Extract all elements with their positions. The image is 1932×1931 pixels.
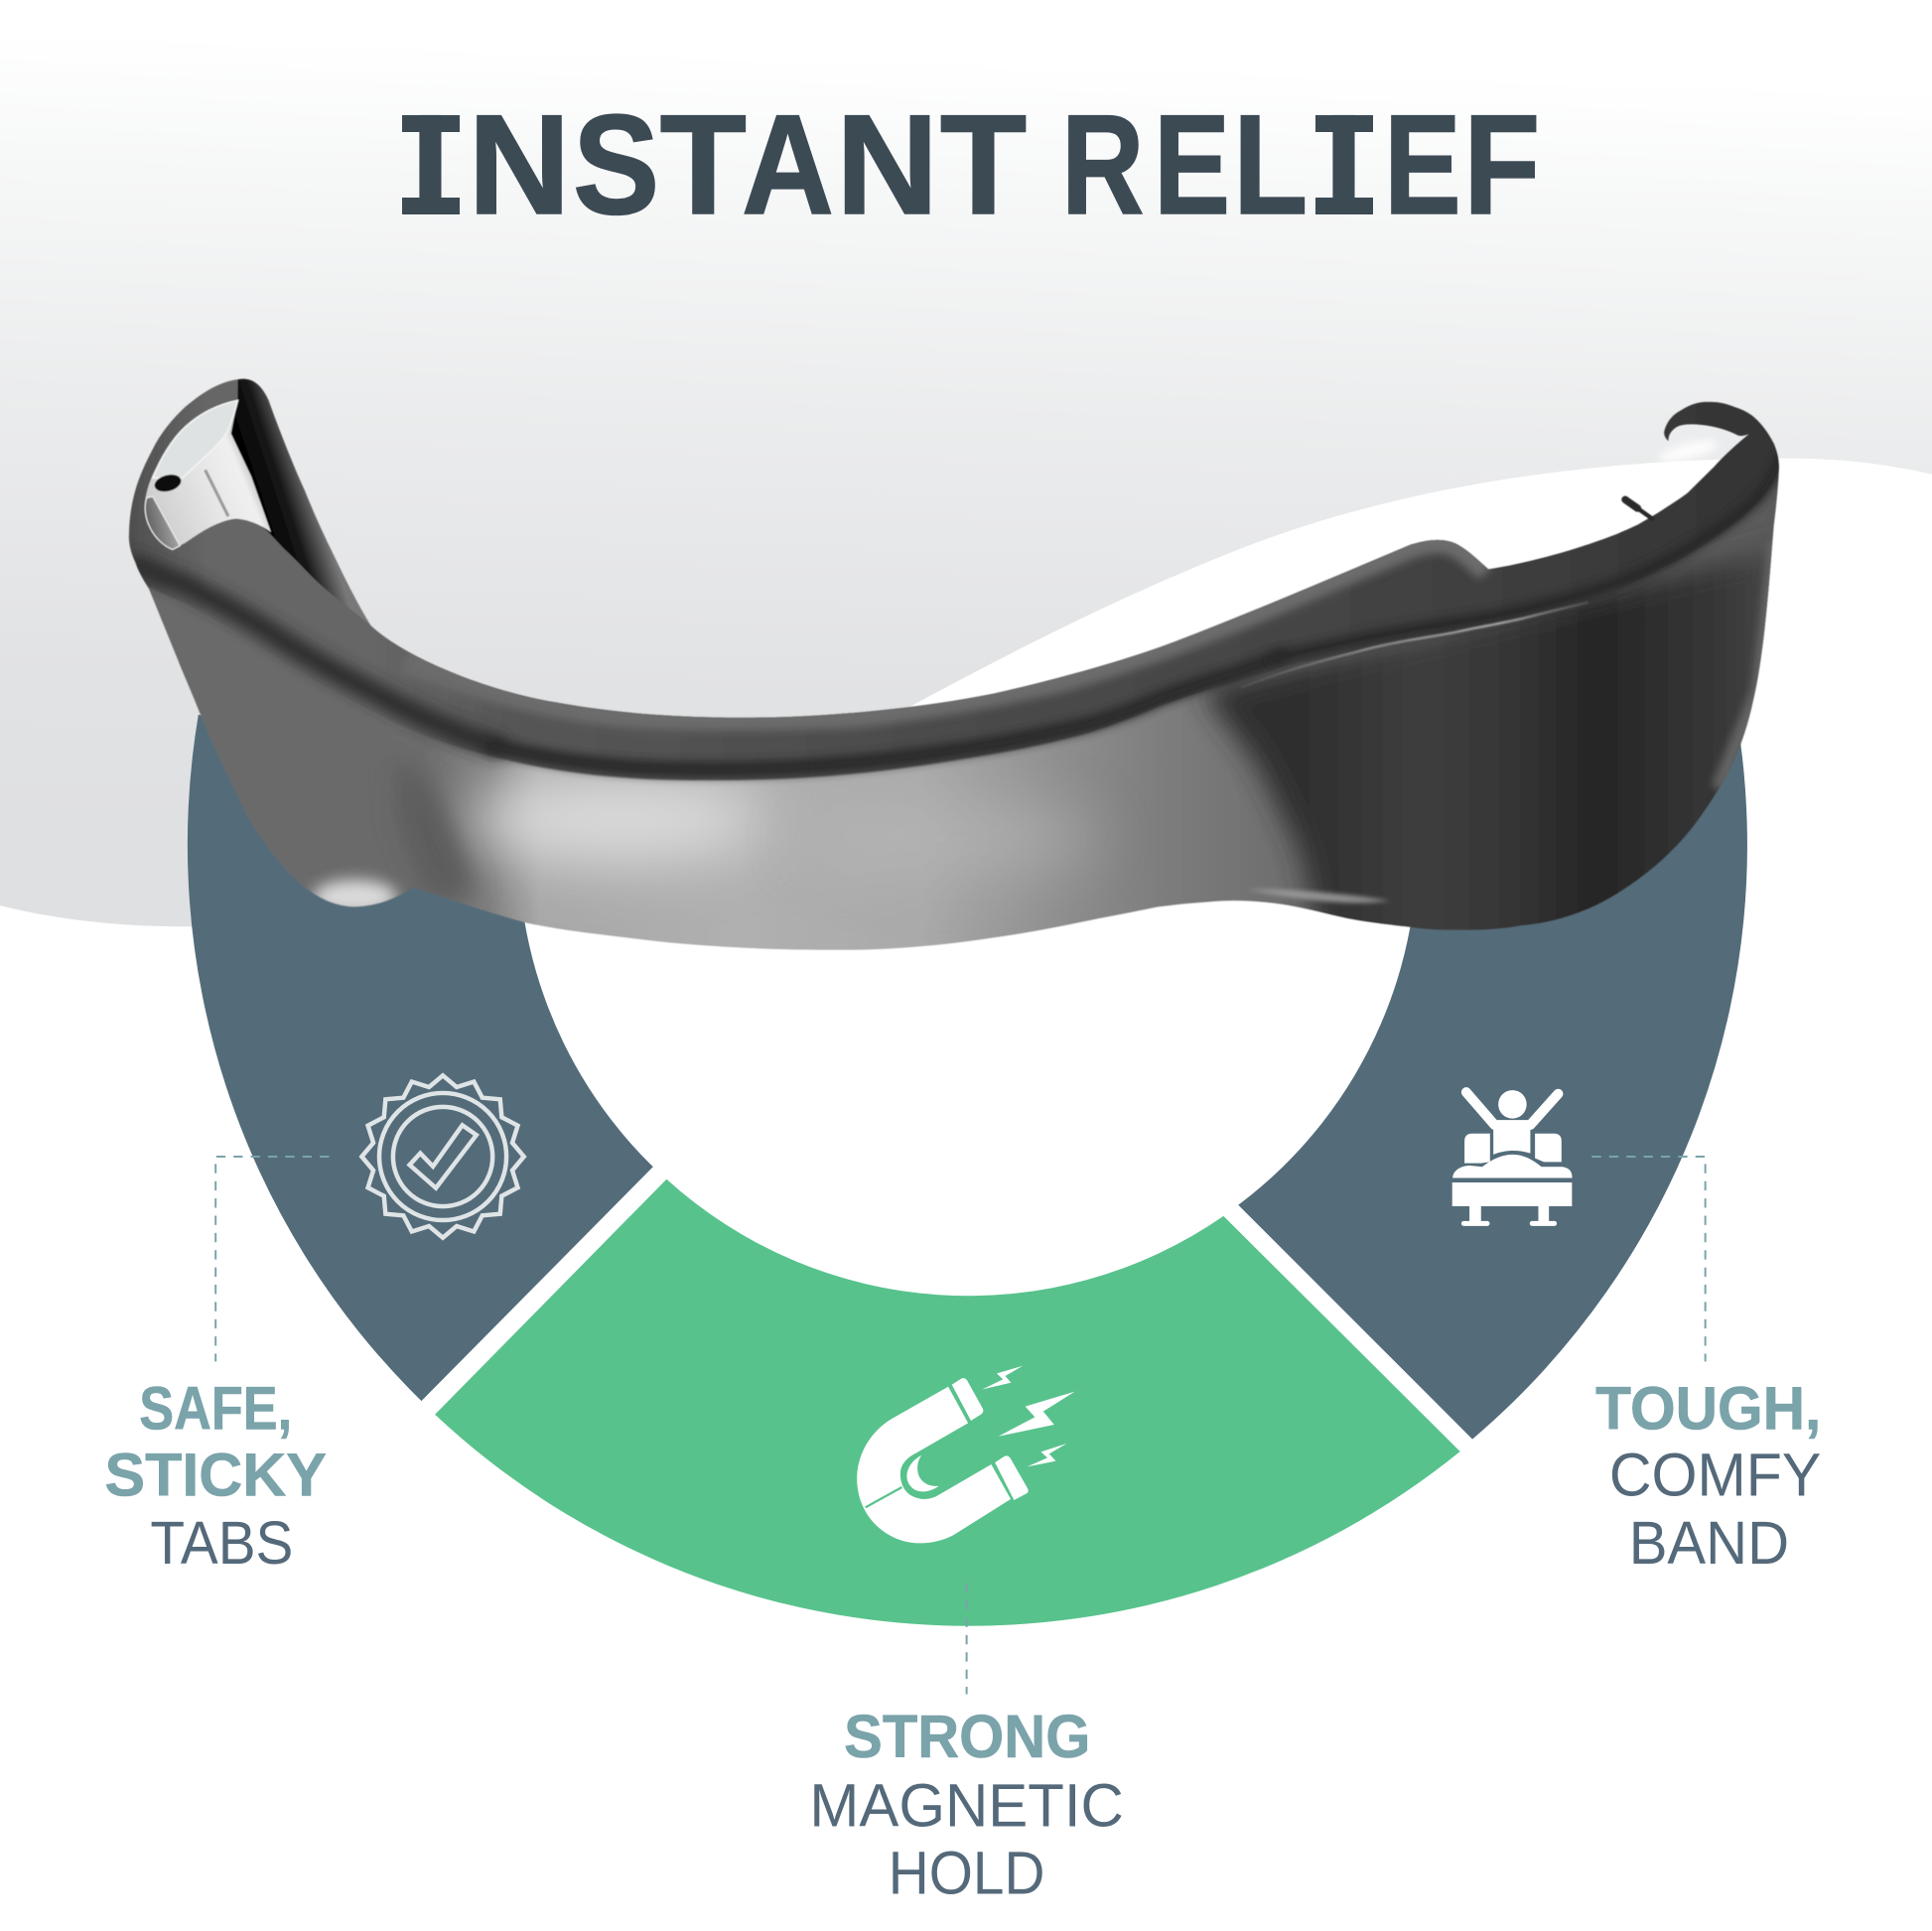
label: tough, comfy band: COMFY <box>1609 1442 1821 1509</box>
cup hole <box>153 472 183 494</box>
label: safe, sticky tabs: SAFE, <box>139 1375 292 1443</box>
dark wedge behind cup <box>230 379 370 625</box>
label: tough, comfy band: TOUGH, <box>1595 1375 1821 1443</box>
title: N <box>468 86 571 244</box>
icon: horseshoe magnet <box>857 1366 1075 1543</box>
label: strong magnetic hold <box>809 1703 1124 1907</box>
title: L <box>1233 86 1308 244</box>
title: S <box>573 86 659 244</box>
label: safe, sticky tabs <box>104 1375 327 1577</box>
label: tough, comfy band: BAND <box>1629 1509 1789 1577</box>
label: strong magnetic hold: HOLD <box>889 1840 1044 1907</box>
background: grey wave <box>0 0 1932 926</box>
label: safe, sticky tabs: TABS <box>150 1509 293 1577</box>
title: T <box>660 86 747 244</box>
title: R <box>1061 86 1144 244</box>
segment: green centre <box>435 1179 1460 1626</box>
title: T <box>940 86 1027 244</box>
title: I <box>411 86 450 244</box>
dashed leader: left <box>215 1157 329 1361</box>
cup lens <box>153 400 237 479</box>
cup groove <box>206 470 228 516</box>
right small pin <box>1625 499 1652 518</box>
title: E <box>1154 86 1230 244</box>
right tip glare <box>1658 436 1719 466</box>
label: safe, sticky tabs: STICKY <box>104 1442 327 1509</box>
cup left crescent <box>145 496 180 550</box>
segment: left blue <box>188 715 653 1401</box>
title: N <box>836 86 938 244</box>
segment: right blue <box>1238 721 1747 1440</box>
product: magnetic nasal band <box>111 357 1805 961</box>
icon: person in bed <box>1452 1090 1573 1226</box>
title <box>402 86 1540 244</box>
title: F <box>1463 86 1540 244</box>
icon: badge with check <box>361 1075 524 1238</box>
title: E <box>1384 86 1460 244</box>
title: I <box>1324 86 1363 244</box>
dashed leader: bottom <box>966 1584 968 1694</box>
ring chart: three segments <box>188 715 1747 1626</box>
label: strong magnetic hold: MAGNETIC <box>809 1771 1124 1839</box>
label: strong magnetic hold: STRONG <box>844 1703 1090 1770</box>
silver cup <box>145 400 271 550</box>
dashed leader: right <box>1591 1157 1706 1361</box>
title: A <box>742 86 834 244</box>
label: tough, comfy band <box>1595 1375 1821 1577</box>
